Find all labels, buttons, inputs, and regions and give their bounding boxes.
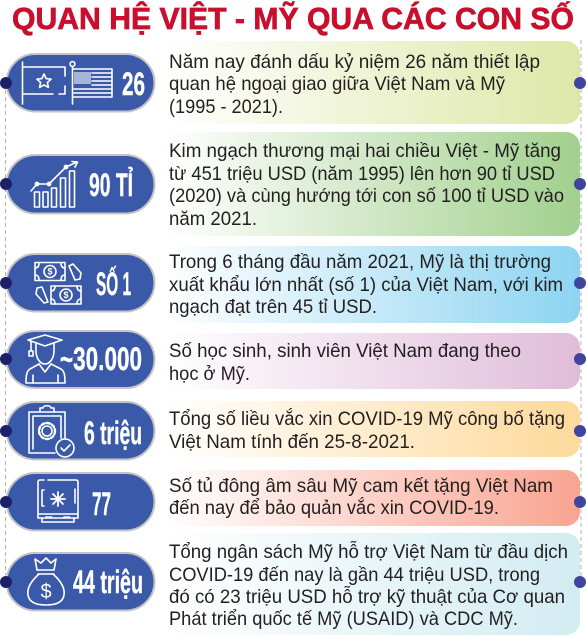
row: vaccines (0, 401, 586, 460)
panel: trade text (165, 132, 580, 236)
pill: so 1 (6, 254, 154, 312)
icon: banknotes (35, 262, 81, 304)
dot left (0, 77, 12, 89)
panel: 26 years text: (1995 - 2021). (169, 96, 283, 118)
panel: 26 years text (165, 41, 580, 124)
panel: budget text: đó có 23 triệu USD hỗ trợ kỹ thuật của Cơ quan (169, 585, 565, 608)
panel: budget text (165, 533, 580, 635)
panel: 26 years text: Năm nay đánh dấu kỷ niệm 26 năm thiết lập (169, 51, 540, 73)
value: 44 trieu: 44 triệu (73, 564, 143, 600)
icon: money bag (28, 558, 64, 605)
dot right (574, 77, 586, 89)
panel: freezer text: đến nay để bảo quản vắc xin COVID-19. (169, 496, 499, 519)
dot left (0, 277, 12, 289)
pill: 44 trieu (6, 553, 154, 610)
value: 90 ti: 90 TỈ (89, 167, 133, 203)
row: students (0, 331, 586, 389)
title: QUAN HỆ VIỆT - MỸ QUA CÁC CON SỐ (12, 0, 574, 36)
dollar signs (47, 266, 69, 300)
panel: freezer text: Số tủ đông âm sâu Mỹ cam kết tặng Việt Nam (169, 475, 553, 497)
icon: growth chart (31, 162, 78, 207)
panel: 26 years text: quan hệ ngoại giao giữa Việt Nam và Mỹ (169, 73, 505, 95)
panel: freezer text (165, 470, 580, 526)
dot right (574, 353, 586, 365)
row: budget (0, 533, 586, 635)
value: 6 trieu: 6 triệu (84, 415, 142, 451)
value: 77: 77 (92, 486, 111, 522)
pill: 77 (6, 473, 154, 530)
icon: graduate (26, 335, 65, 383)
pill: 6 trieu (6, 402, 154, 460)
icon: dollar sign: $ (40, 581, 52, 603)
panel: trade text: năm 2021. (169, 208, 257, 230)
panel: export text: Trong 6 tháng đầu năm 2021, Mỹ là thị trường (169, 251, 551, 273)
dot right (574, 178, 586, 190)
dot right (574, 496, 586, 508)
dot left (0, 353, 12, 365)
panel: export text: ngạch đạt trên 45 tỉ USD. (169, 296, 377, 318)
panel: trade text: Kim ngạch thương mại hai chiều Việt - Mỹ tăng (169, 140, 561, 162)
panel: export text: xuất khẩu lớn nhất (số 1) của Việt Nam, với kim (169, 274, 563, 296)
row: freezers (0, 470, 586, 530)
icon: freezer (38, 480, 78, 522)
dot left (0, 425, 12, 437)
dot left (0, 496, 12, 508)
icon: clipboard (29, 406, 74, 457)
dollar signs: $ (63, 290, 69, 300)
pill: 26 (6, 54, 154, 112)
dot right (574, 576, 586, 588)
dot left (0, 576, 12, 588)
icon: flags (22, 62, 112, 104)
value: 26: 26 (122, 66, 145, 102)
panel: budget text: Tổng ngân sách Mỹ hỗ trợ Việt Nam từ đầu dịch (169, 540, 568, 563)
value: 30.000: ~30.000 (60, 341, 142, 377)
panel: budget text: Phát triển quốc tế Mỹ (USAID) và CDC Mỹ. (169, 608, 518, 630)
pill: 30.000 (6, 331, 154, 388)
dollar signs: $ (47, 266, 53, 276)
panel: trade text: (2020) và cùng hướng tới con số 100 tỉ USD vào (169, 185, 564, 207)
dot right (574, 277, 586, 289)
panel: students text: Số học sinh, sinh viên Việt Nam đang theo (169, 340, 521, 362)
panel: budget text: COVID-19 đến nay là gần 44 triệu USD, trong (169, 564, 540, 586)
panel: vaccine text: Việt Nam tính đến 25-8-2021. (169, 431, 415, 453)
panel: students text (165, 333, 580, 389)
panel: vaccine text (165, 401, 580, 457)
panel: export text (165, 246, 580, 323)
dot right (574, 425, 586, 437)
panel: students text: học ở Mỹ. (169, 363, 250, 385)
dot left (0, 178, 12, 190)
row: 26 years (0, 41, 586, 124)
row: number 1 (0, 246, 586, 323)
pill: so 1: SỐ 1 (96, 266, 131, 302)
row: 90 billion (0, 132, 586, 236)
pill: 90 ti (6, 155, 154, 214)
panel: vaccine text: Tổng số liều vắc xin COVID-19 Mỹ công bố tặng (169, 407, 565, 430)
panel: trade text: từ 451 triệu USD (năm 1995) lên hơn 90 tỉ USD (169, 163, 555, 185)
